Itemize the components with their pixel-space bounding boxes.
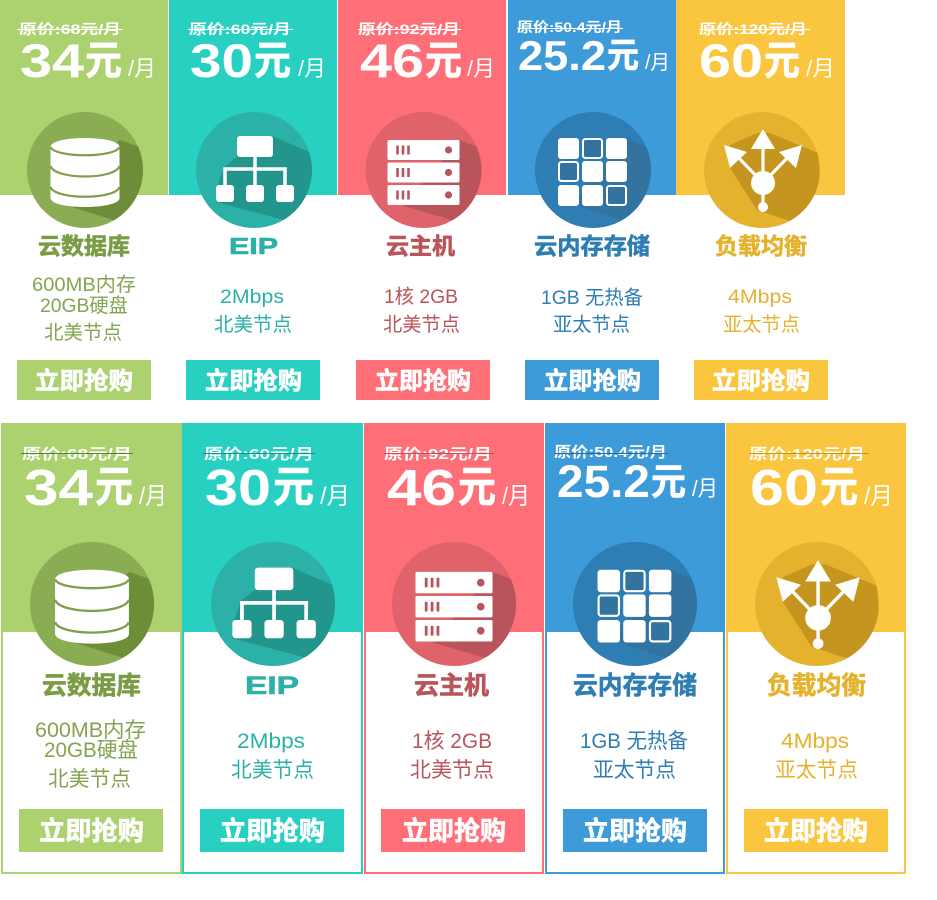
buy button: 立即抢购 — [375, 367, 471, 395]
specs: 亚太节点 — [775, 759, 858, 782]
specs: 20GB硬盘 — [44, 739, 138, 762]
icon: memory grid — [535, 112, 655, 232]
specs — [383, 286, 460, 336]
price — [24, 459, 133, 516]
panel: top row 云数据库 — [0, 0, 168, 400]
product name: EIP — [245, 672, 299, 700]
buy button: 立即抢购 — [35, 367, 133, 395]
specs: 4Mbps — [728, 286, 792, 308]
buy button: 立即抢购 — [402, 816, 506, 846]
price: 元 — [820, 464, 858, 512]
icon: server — [392, 542, 520, 670]
panel: top row 云内存存储 — [508, 0, 676, 400]
specs — [410, 730, 494, 782]
price: 元 — [254, 39, 291, 83]
specs: 1核 2GB — [412, 730, 492, 753]
buy button: 立即抢购 — [712, 367, 810, 395]
panel: bottom row 云主机 — [364, 423, 544, 874]
specs: 1GB 无热备 — [541, 287, 643, 309]
buy button: 立即抢购 — [39, 816, 144, 846]
product name: 云内存存储 — [534, 233, 650, 259]
icon: network — [196, 112, 316, 232]
unit: /月 — [806, 56, 835, 81]
product name: 云主机 — [414, 672, 489, 700]
price — [699, 34, 800, 87]
specs: 600MB内存 — [35, 719, 146, 742]
price — [190, 34, 291, 87]
price: 46 — [387, 459, 456, 516]
buy button — [356, 360, 490, 400]
original price: 原价:68元/月 — [19, 21, 121, 37]
icon: load balancer — [755, 542, 883, 670]
buy button: 立即抢购 — [220, 816, 325, 846]
buy button: 立即抢购 — [205, 367, 302, 395]
price: 34 — [20, 34, 84, 87]
price: 46 — [360, 34, 424, 87]
unit: /月 — [502, 483, 530, 510]
icon: memory grid — [573, 542, 701, 670]
panel: top row 负载均衡 — [676, 0, 845, 400]
specs: 2Mbps — [237, 730, 305, 753]
product name: 负载均衡 — [767, 672, 866, 700]
original price: 原价:120元/月 — [749, 446, 865, 463]
specs — [214, 286, 292, 336]
price: 34 — [24, 459, 94, 516]
price — [360, 34, 462, 87]
price — [518, 32, 639, 79]
unit: /月 — [139, 483, 167, 510]
price: 元 — [85, 39, 122, 83]
unit: /月 — [128, 56, 156, 81]
specs — [580, 730, 688, 782]
price: 元 — [425, 39, 462, 83]
specs: 亚太节点 — [553, 314, 630, 336]
specs — [541, 287, 643, 336]
price — [750, 459, 858, 516]
product name: 负载均衡 — [715, 233, 807, 259]
buy button: 立即抢购 — [544, 367, 641, 395]
panel: top row EIP — [169, 0, 337, 400]
product name: 云内存存储 — [573, 672, 697, 700]
specs: 4Mbps — [781, 730, 849, 753]
unit: /月 — [692, 476, 718, 501]
specs — [775, 730, 858, 782]
price: 60 — [699, 34, 763, 87]
buy button — [694, 360, 828, 400]
price: 25.2 — [518, 32, 606, 79]
price — [20, 34, 122, 87]
original price: 原价:92元/月 — [358, 21, 460, 37]
price: 元 — [764, 39, 800, 83]
specs: 北美节点 — [410, 759, 494, 782]
panel: bottom row 负载均衡 — [726, 423, 906, 874]
original price: 原价:92元/月 — [384, 446, 492, 463]
specs: 北美节点 — [214, 314, 292, 336]
price — [387, 459, 496, 516]
unit: /月 — [467, 56, 495, 81]
panel: bottom row 云内存存储 — [545, 423, 725, 874]
original price: 原价:50.4元/月 — [554, 444, 667, 461]
price: 25.2 — [557, 456, 650, 507]
specs: 亚太节点 — [723, 314, 800, 336]
specs: 北美节点 — [48, 768, 131, 791]
unit: /月 — [298, 56, 326, 81]
specs: 北美节点 — [383, 314, 460, 336]
buy button — [525, 360, 659, 400]
buy button — [744, 809, 888, 852]
original price: 原价:60元/月 — [189, 21, 291, 37]
specs — [231, 730, 314, 782]
specs — [35, 719, 146, 791]
original price: 原价:50.4元/月 — [517, 19, 622, 35]
unit: /月 — [864, 483, 893, 510]
specs — [32, 274, 136, 344]
original price: 原价:120元/月 — [699, 21, 807, 37]
icon: server — [366, 112, 486, 232]
unit: /月 — [320, 483, 350, 510]
specs: 2Mbps — [220, 286, 284, 308]
price: 元 — [607, 36, 639, 76]
price: 元 — [95, 464, 133, 512]
buy button: 立即抢购 — [583, 816, 687, 846]
product name: 云数据库 — [38, 233, 130, 259]
specs — [723, 286, 800, 336]
price — [557, 456, 686, 507]
price: 元 — [273, 464, 314, 512]
price: 60 — [750, 459, 818, 516]
specs: 北美节点 — [231, 759, 314, 782]
buy button — [381, 809, 525, 852]
price: 元 — [651, 462, 686, 502]
specs: 600MB内存 — [32, 274, 136, 296]
buy button — [17, 360, 151, 400]
product name: 云主机 — [386, 233, 455, 259]
price: 30 — [205, 459, 271, 516]
specs: 北美节点 — [44, 322, 122, 344]
specs: 亚太节点 — [593, 759, 676, 782]
price — [205, 459, 314, 516]
buy button — [200, 809, 344, 852]
buy button — [563, 809, 707, 852]
icon: load balancer — [704, 112, 824, 232]
original price: 原价:60元/月 — [204, 446, 314, 463]
product name: 云数据库 — [42, 672, 141, 700]
buy button — [186, 360, 320, 400]
specs: 20GB硬盘 — [40, 295, 128, 317]
product name: EIP — [229, 233, 278, 259]
price: 30 — [190, 34, 253, 87]
unit: /月 — [645, 52, 670, 74]
specs: 1核 2GB — [384, 286, 458, 308]
icon: database — [27, 112, 147, 232]
panel: bottom row 云数据库 — [1, 423, 182, 874]
panel: bottom row EIP — [182, 423, 363, 874]
original price: 原价:68元/月 — [22, 446, 132, 463]
buy button — [19, 809, 163, 852]
panel: top row 云主机 — [338, 0, 506, 400]
icon: network — [211, 542, 339, 670]
buy button: 立即抢购 — [764, 816, 868, 846]
price: 元 — [458, 464, 496, 512]
specs: 1GB 无热备 — [580, 730, 688, 753]
icon: database — [30, 542, 158, 670]
